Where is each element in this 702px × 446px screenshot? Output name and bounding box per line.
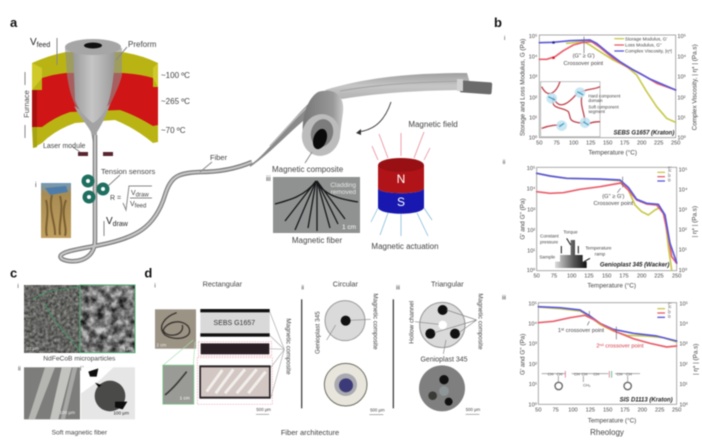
legend: G' G'' |η*|: [668, 166, 672, 182]
axes labels: 10⁵: [677, 33, 686, 40]
panel d: fiber architecture: [144, 265, 484, 437]
axes labels: 50: [536, 141, 542, 147]
axes labels: 10⁰: [677, 135, 687, 142]
furnace axis label: [22, 72, 31, 138]
panel label b: b: [494, 15, 502, 30]
axes labels: 10¹: [679, 382, 688, 388]
chart iii: SIS D1113: SIS D1113 (Kraton): [620, 397, 673, 403]
furnace temperatures: ~70 ºC: [161, 126, 186, 135]
axes labels: 50: [535, 407, 541, 413]
curves: [537, 173, 677, 270]
axes labels: 10⁵: [679, 166, 687, 173]
draw ratio formula: draw: [136, 192, 149, 198]
inset: chemical structure: CH: [557, 371, 563, 376]
photo: coiled fiber: 2 cm: [156, 342, 167, 347]
heading: circular: Circular: [333, 279, 359, 288]
panel label c: c: [10, 265, 17, 280]
panel c: SEM microscopy: i: [17, 284, 19, 290]
draw ratio formula: [110, 186, 152, 210]
axes labels: 225: [654, 141, 663, 147]
axes labels: 10³: [527, 207, 535, 213]
scale bar: [369, 407, 385, 415]
preform label: Preform: [128, 40, 157, 49]
axes labels: [520, 300, 699, 425]
draw speed label: V: [106, 216, 113, 227]
chart iii: SIS D1113: 1ˢᵗ crossover point: [558, 327, 605, 334]
furnace temperatures: [161, 71, 190, 135]
axes labels: [520, 33, 698, 157]
inset: rheometer: [539, 229, 612, 268]
legend: Loss Modulus, G'': [625, 43, 662, 48]
draw ratio formula: V: [130, 201, 135, 208]
scale bar: [256, 407, 271, 414]
magnetic fiber label: Magnetic fiber: [292, 236, 342, 245]
SEM image: fiber surface: [18, 367, 80, 419]
axes labels: 10¹: [679, 247, 687, 253]
axes labels: 10⁴: [679, 320, 689, 327]
chart ii: Genioplast 345: (G'' ≥ G'): [602, 194, 624, 200]
axes labels: 10⁰: [528, 401, 538, 408]
inset: polymer domains: Hard component: [588, 94, 621, 99]
magnetic composite label: [272, 152, 344, 174]
legend: [657, 166, 672, 182]
rheology caption: Rheology: [590, 428, 624, 437]
label: magnetic composite: Magnetic composite: [284, 318, 291, 375]
leader lines to magnetic composite: [270, 312, 284, 397]
heading: rectangular: Rectangular: [203, 279, 243, 288]
axes labels: 10³: [679, 342, 688, 348]
panel c: SEM microscopy: [10, 265, 135, 436]
axes labels: 125: [584, 274, 594, 280]
magnet with field lines: N: [397, 172, 405, 186]
axes labels: 150: [603, 141, 612, 147]
axes labels: [520, 165, 699, 289]
inset: polymer domains: Soft component: [588, 105, 619, 110]
axes labels: 10⁴: [528, 320, 538, 327]
magnet with field lines: S: [397, 195, 405, 209]
inset: rheometer: pressure: [540, 240, 559, 245]
axes labels: 100: [567, 274, 576, 280]
axes labels: 10¹: [529, 382, 537, 388]
SEM image: fiber surface: 100 µm: [59, 410, 75, 415]
inset: chemical structure: CH: [626, 371, 632, 376]
inset iii magnetic fiber photo: [266, 176, 360, 233]
SEM image: fiber surface: ii: [18, 367, 21, 373]
inset: rheometer: Constant: [540, 234, 559, 239]
chart ii: Genioplast 345: ii: [503, 160, 505, 166]
axes labels: 225: [655, 407, 664, 413]
axes labels: Storage and Loss Modulus, G (Pa): [520, 39, 527, 136]
axes labels: 75: [554, 141, 560, 147]
axes labels: 10⁴: [679, 186, 688, 193]
chart ii: Genioplast 345: [503, 160, 699, 289]
axes labels: 10⁴: [677, 54, 687, 61]
axes labels: 75: [551, 274, 557, 280]
axes labels: 10⁵: [529, 33, 537, 40]
SEM image: particles high magnification: [80, 285, 135, 353]
inset: chemical structure: CH: [582, 371, 588, 376]
heading: triangular: Triangular: [431, 279, 464, 288]
inset iii magnetic fiber photo: Cladding: [330, 182, 356, 189]
inset: rheometer: ramp: [595, 251, 606, 256]
legend: Storage Modulus, G': [625, 37, 667, 42]
chart i: SEBS G1657: (G'' ≥ G'): [573, 53, 595, 59]
chart i: SEBS G1657: i: [504, 36, 505, 42]
magnetic actuation label: Magnetic actuation: [371, 242, 439, 251]
magnetic field label: Magnetic field: [408, 120, 458, 129]
laser module: Laser module: [43, 143, 86, 150]
axes labels: 125: [586, 407, 595, 413]
SEM image: particles low magnification: [24, 285, 80, 353]
draw ratio formula: feed: [135, 204, 146, 210]
axes labels: 10¹: [529, 115, 537, 121]
curves: [538, 307, 677, 347]
label: section ii: ii: [301, 285, 304, 291]
axes labels: 50: [534, 274, 540, 280]
axes labels: 10⁰: [679, 401, 689, 408]
draw ratio formula: V: [131, 190, 136, 197]
axes labels: 10³: [677, 75, 686, 81]
schematic: circular cross-section: [325, 301, 371, 341]
draw ratio formula: R =: [110, 195, 121, 202]
rectangular architecture: i: [154, 283, 156, 289]
axes labels: | η* | (Pa.s): [692, 344, 699, 375]
axes labels: Temperature (°C): [588, 417, 636, 425]
photo: fiber close-up: 1 cm: [180, 395, 190, 400]
chart ii: Genioplast 345: Genioplast 345 (Wacker): [600, 263, 669, 269]
label: genioplast triangular: Genioplast 345: [421, 356, 468, 363]
scale bar: 500 µm: [370, 407, 385, 412]
caption: soft magnetic fiber: Soft magnetic fiber: [52, 429, 108, 436]
photo: fiber close-up: [163, 365, 194, 404]
axes labels: 10²: [679, 227, 687, 233]
furnace axis label: Furnace: [22, 90, 31, 118]
axes labels: 225: [654, 274, 664, 280]
inset iii magnetic fiber photo: removed: [331, 189, 356, 196]
axes labels: 10³: [679, 207, 687, 213]
SEM image: fiber cross-section: 100 µm: [113, 410, 129, 415]
feed speed label: feed: [37, 42, 50, 49]
fiber label: [200, 153, 228, 172]
micrograph: circular fiber: [324, 363, 367, 406]
draw speed label: [104, 216, 129, 236]
schematic: SEBS G1657 cross-section: SEBS G1657: [214, 320, 255, 327]
panel label a: a: [10, 15, 18, 30]
axes labels: 10²: [529, 95, 537, 101]
magnetic composite label: Magnetic composite: [272, 165, 344, 174]
axes labels: 10⁰: [529, 135, 538, 142]
axes labels: 200: [638, 407, 647, 413]
inset photo i: [35, 182, 71, 238]
axes labels: 200: [637, 141, 646, 147]
axes labels: 10³: [529, 75, 537, 81]
chart iii: SIS D1113: 2ⁿᵈ crossover point: [596, 342, 644, 349]
inset photo i: i: [35, 182, 37, 189]
inset: chemical structure: CH: [593, 371, 599, 376]
inset: chemical structure: CH: [574, 371, 580, 376]
axes labels: 125: [586, 141, 595, 147]
axes labels: 10²: [677, 95, 686, 101]
label: genioplast circular: Genioplast 345: [315, 311, 322, 354]
axes labels: Temperature (°C): [587, 281, 636, 289]
inset: polymer domains: segment: [588, 109, 606, 114]
caption: microparticles: NdFeCoB microparticles: [43, 355, 116, 362]
preform label: [116, 40, 157, 60]
panel a: thermal drawing of fiber: [10, 15, 492, 261]
micrograph: triangular fiber: [419, 365, 465, 411]
SEM image: fiber cross-section: iii: [80, 367, 84, 373]
magnetic fiber tip: [250, 73, 492, 167]
axes labels: 75: [553, 407, 559, 413]
chart ii: Genioplast 345: Crossover point: [594, 201, 634, 207]
legend: [614, 37, 672, 54]
legend: [657, 303, 672, 318]
chart iii: SIS D1113: [502, 295, 699, 425]
inset: chemical structure: CH₃: [583, 382, 591, 387]
micrograph: cross-section: [197, 358, 272, 404]
inset: chemical structure: CH: [617, 371, 623, 376]
axes labels: 150: [603, 407, 612, 413]
scale bar: 500 µm: [466, 407, 481, 412]
axes labels: 175: [619, 274, 629, 280]
fiber label: Fiber: [210, 153, 228, 162]
furnace temperatures: ~100 ºC: [161, 71, 190, 80]
micrograph: strip: [198, 342, 272, 356]
inset: polymer domains: [541, 82, 621, 137]
furnace: [32, 52, 158, 148]
schematic: triangular cross-section: [415, 302, 477, 354]
axes labels: 175: [620, 141, 629, 147]
axes labels: 10⁰: [527, 267, 536, 274]
axes labels: 250: [671, 141, 680, 147]
inset: rheometer: Temperature: [585, 245, 612, 250]
inset: rheometer: Torque: [563, 229, 578, 234]
axes labels: Complex Viscosity, | η* | (Pa.s): [691, 44, 698, 130]
inset: rheometer: Sample: [539, 255, 556, 260]
chart i: SEBS G1657: [504, 33, 698, 157]
SEM image: particles low magnification: 20 µm: [26, 346, 39, 351]
magnet with field lines: [371, 132, 432, 236]
axes labels: 175: [620, 407, 630, 413]
circular and triangular architecture: [315, 279, 484, 415]
axes labels: 10⁴: [529, 54, 538, 61]
axes labels: 10³: [529, 342, 537, 348]
tension sensors: [82, 167, 155, 204]
bending arrow: [356, 102, 391, 135]
axes labels: 10²: [529, 362, 537, 368]
axes labels: 150: [602, 274, 611, 280]
axes labels: 200: [637, 274, 646, 280]
label: section iii: iii: [396, 285, 400, 291]
axes labels: 10⁴: [527, 186, 536, 193]
SEM image: fiber cross-section: [80, 367, 135, 419]
panel label d: d: [144, 265, 152, 280]
fiber architecture caption: Fiber architecture: [281, 428, 339, 437]
axes labels: 100: [568, 407, 578, 413]
axes labels: 10²: [679, 362, 688, 368]
tension sensors: Tension sensors: [101, 167, 155, 176]
inset: chemical structure: [542, 371, 640, 390]
laser module: [43, 143, 113, 156]
axes labels: Temperature (°C): [588, 149, 637, 157]
scale bar: 500 µm: [256, 407, 271, 412]
chart i: SEBS G1657: Crossover point: [564, 61, 604, 67]
schematic: SEBS G1657 cross-section: [200, 309, 270, 337]
curves: [539, 37, 676, 122]
label: magnetic composite triangular: Magnetic composite: [477, 293, 484, 350]
fiber: [61, 135, 252, 261]
photo: coiled fiber: [155, 309, 196, 349]
preform: [65, 39, 122, 142]
axes labels: 10²: [527, 228, 535, 234]
axes labels: 100: [569, 141, 578, 147]
inset iii magnetic fiber photo: iii: [266, 176, 271, 183]
feed speed label: [30, 37, 57, 65]
axes labels: G' and G'' (Pa): [520, 198, 527, 240]
label: hollow channel: Hollow channel: [409, 301, 416, 344]
SEM image: particles high magnification: 5 µm: [123, 346, 133, 351]
legend: G' G'' |η*|: [668, 303, 672, 318]
rectangular architecture: [144, 265, 304, 414]
axes labels: 10¹: [677, 115, 686, 121]
panel b: rheology: [494, 15, 699, 437]
chart i: SEBS G1657: SEBS G1657 (Kraton): [613, 130, 674, 136]
axes labels: 250: [672, 407, 681, 413]
feed speed label: V: [30, 37, 37, 48]
axes labels: G' and G'' (Pa): [520, 334, 527, 375]
inset: polymer domains: domain: [588, 98, 603, 103]
chart iii: SIS D1113: iii: [502, 295, 506, 301]
label: magnetic composite circular: Magnetic composite: [372, 293, 379, 350]
axes labels: 10⁵: [528, 300, 537, 307]
axes labels: 10⁰: [679, 267, 688, 274]
inset iii magnetic fiber photo: 1 cm: [342, 224, 356, 231]
legend: Complex Viscosity, |η*|: [625, 49, 672, 54]
axes labels: 250: [672, 274, 681, 280]
axes labels: 10⁵: [527, 165, 535, 172]
axes labels: | η* | (Pa.s): [692, 206, 699, 237]
furnace temperatures: ~265 ºC: [161, 97, 190, 106]
inset: chemical structure: CH: [548, 371, 554, 376]
draw speed label: draw: [113, 221, 129, 228]
axes labels: 10⁵: [679, 300, 688, 307]
scale bar: [466, 407, 481, 414]
axes labels: 10¹: [527, 249, 535, 255]
